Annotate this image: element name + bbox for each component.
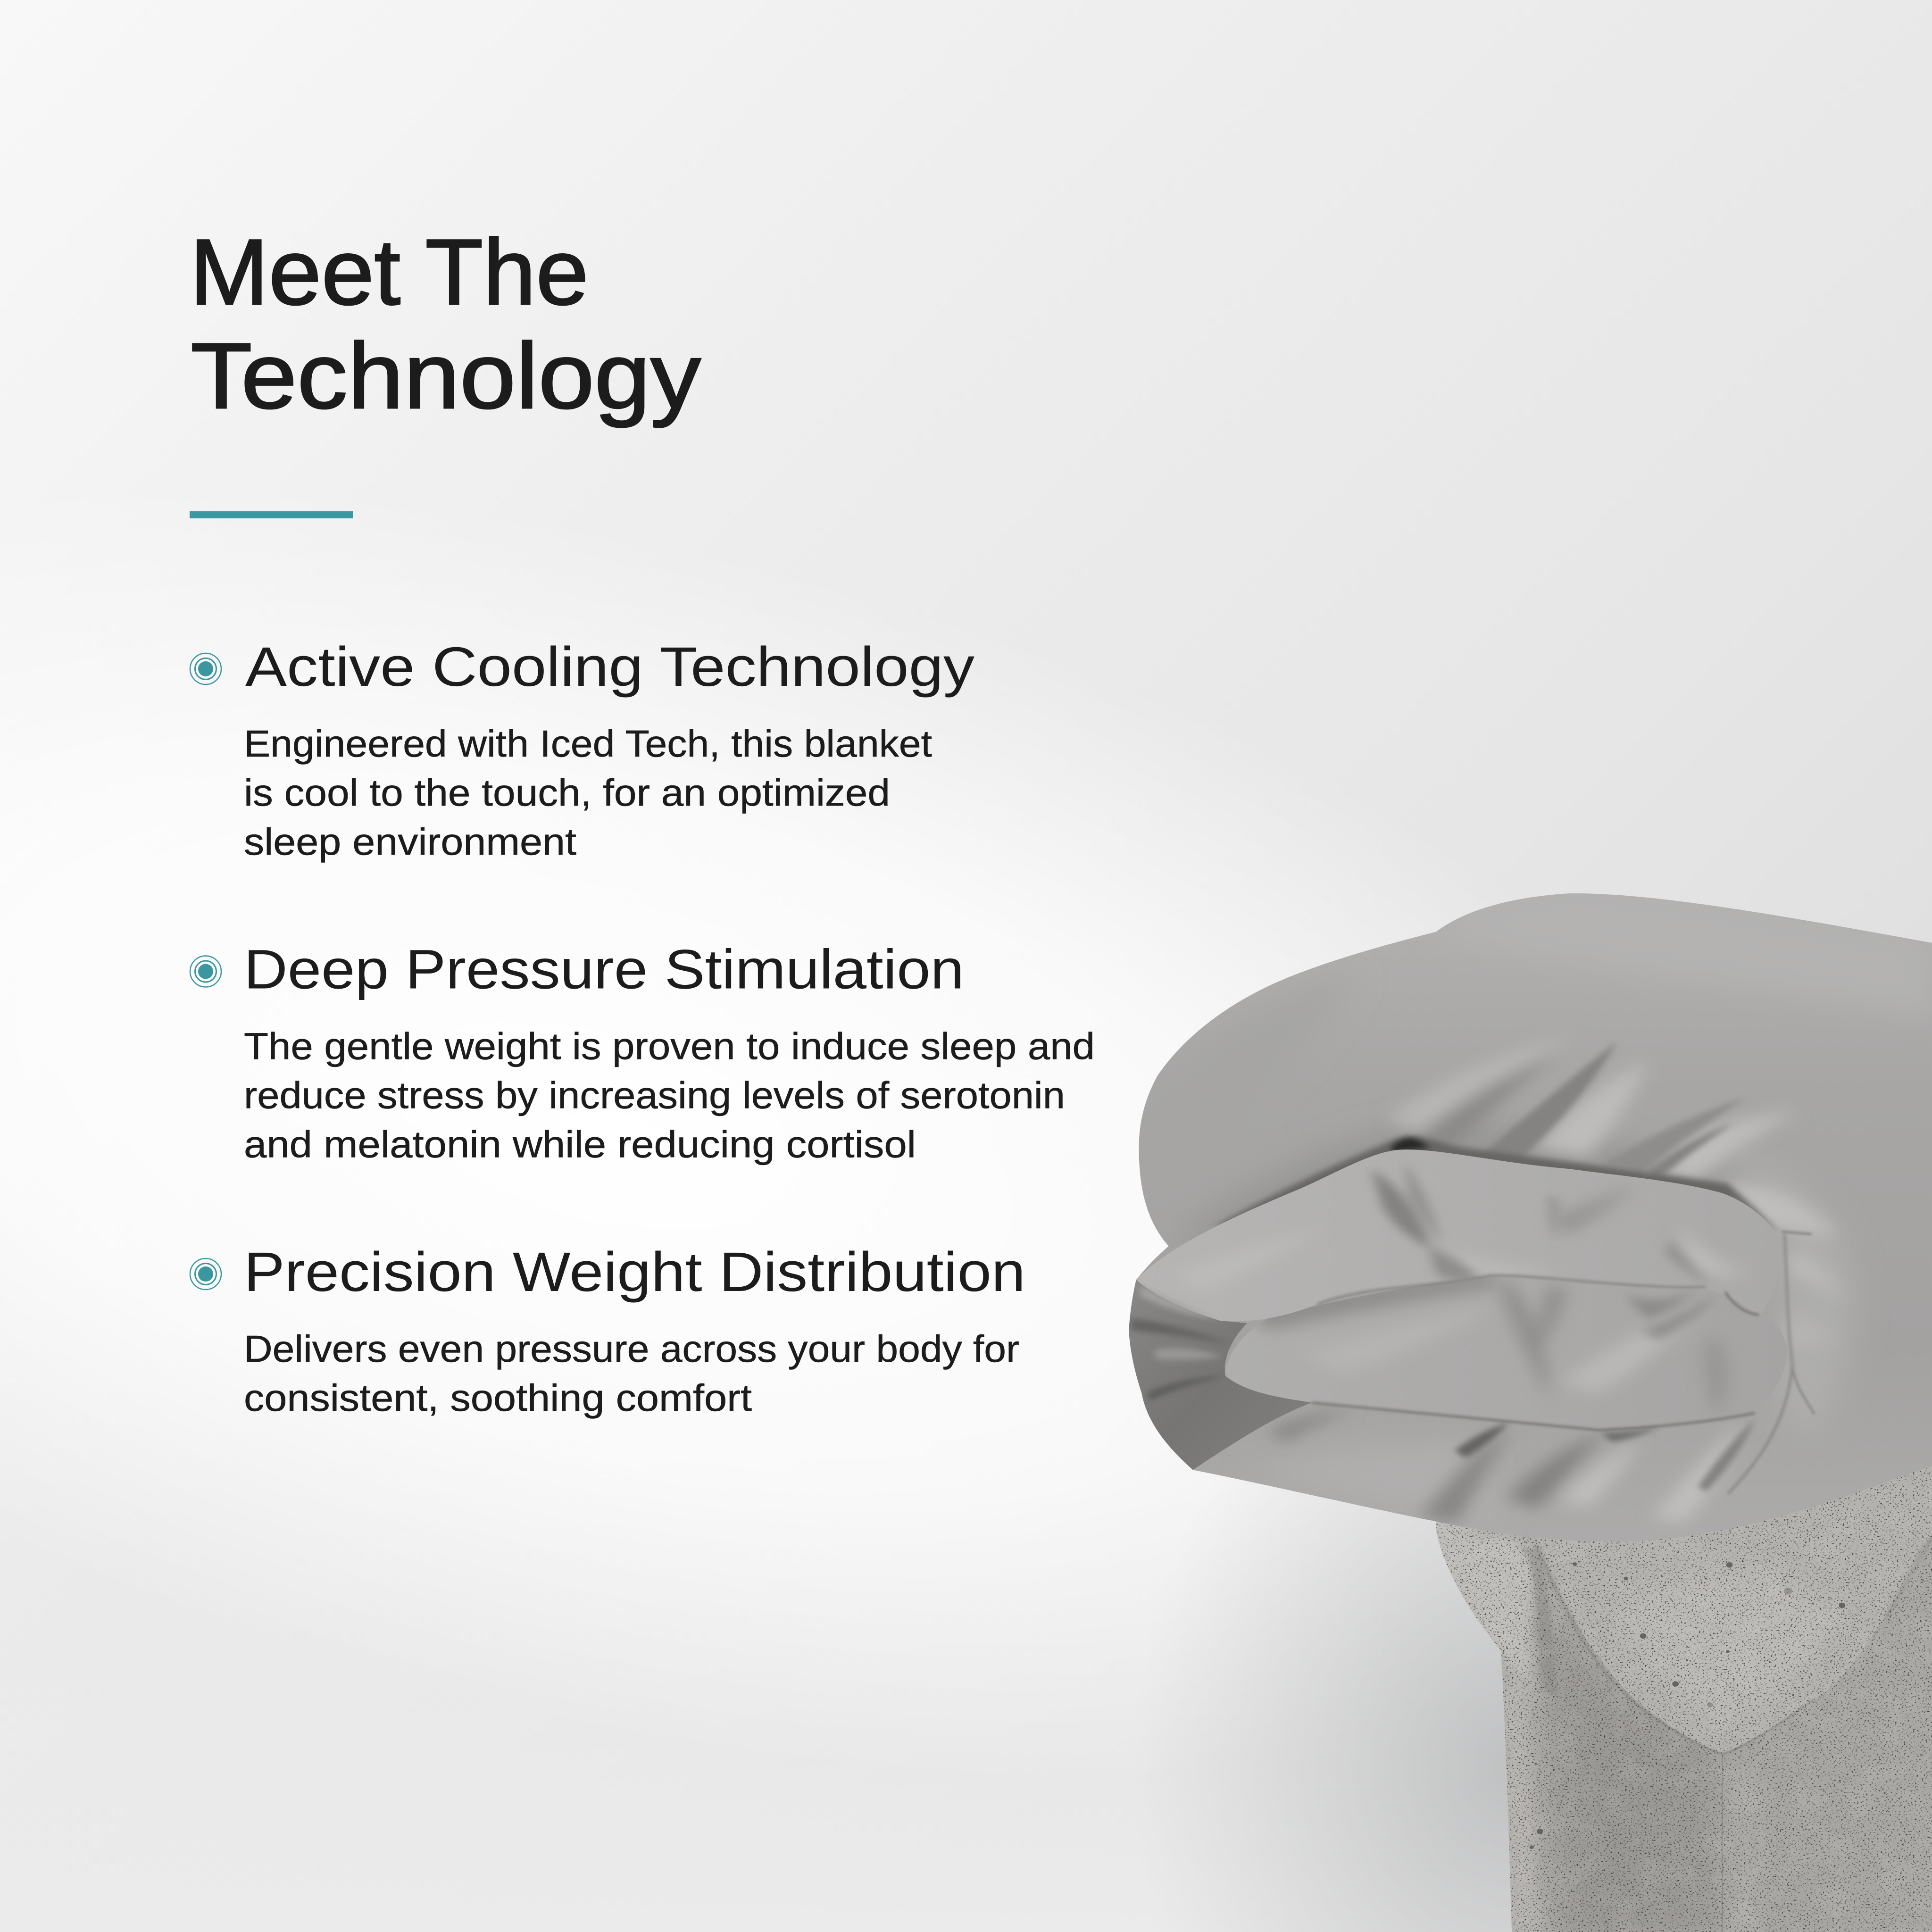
dark inner fold (1129, 1280, 1312, 1470)
body text: deep pressure stimulation (244, 1025, 1095, 1165)
upper fold wrinkles (1387, 1037, 1841, 1349)
accent rule (190, 511, 353, 518)
body text: active cooling technology: Engineered with Iced Tech, this blanket (244, 723, 932, 765)
title: Meet The (190, 220, 589, 324)
weighted blanket (1129, 893, 1932, 1542)
title (190, 220, 701, 428)
light mottling (1436, 1462, 1932, 1932)
body text: active cooling technology (244, 723, 932, 863)
heading: precision weight distribution: Precision Weight Distribution (244, 1241, 1025, 1303)
larger pits (1529, 1562, 1845, 1849)
lower roll shading (1247, 1273, 1728, 1417)
blanket outer layer (1129, 893, 1932, 1542)
item: deep pressure stimulation (190, 939, 1095, 1165)
body text: precision weight distribution (244, 1328, 1019, 1419)
crease shadow above upper roll (1215, 1137, 1782, 1234)
body text: active cooling technology: is cool to the touch, for an optimized (244, 772, 890, 814)
heading: deep pressure stimulation: Deep Pressure Stimulation (244, 939, 964, 1001)
column shading (1548, 1634, 1701, 1925)
roll detail creases (1312, 1232, 1812, 1430)
centre wedge (1537, 1462, 1932, 1753)
lower band wrinkles (1268, 1410, 1744, 1523)
body text: precision weight distribution: Delivers even pressure across your body for (244, 1328, 1019, 1370)
item: precision weight distribution (190, 1241, 1025, 1419)
upper roll wrinkles (1171, 1162, 1749, 1292)
wedge edge lines (1584, 1642, 1814, 1754)
icon: target bullet 1 (190, 653, 221, 684)
body text: deep pressure stimulation: The gentle weight is proven to induce sleep and (244, 1025, 1095, 1067)
icon: target bullet 3 (190, 1258, 221, 1290)
item: active cooling technology (190, 636, 974, 863)
heading: active cooling technology: Active Cooling Technology (245, 636, 974, 698)
concrete pedestal (1436, 1462, 1932, 1932)
rounded shoulder highlight (1472, 1541, 1534, 1677)
lower roll (1225, 1275, 1787, 1429)
icon: target bullet 2 (190, 956, 221, 987)
body text: precision weight distribution: consistent, soothing comfort (244, 1377, 752, 1419)
title: Technology (191, 324, 701, 428)
body text: deep pressure stimulation: and melatonin while reducing cortisol (244, 1124, 916, 1165)
concrete speckle (1436, 1462, 1932, 1932)
body text: active cooling technology: sleep environment (244, 821, 576, 863)
body text: deep pressure stimulation: reduce stress by increasing levels of serotonin (244, 1074, 1065, 1116)
broad soft tonal zones (1139, 893, 1932, 1523)
upper roll (1136, 1149, 1781, 1321)
